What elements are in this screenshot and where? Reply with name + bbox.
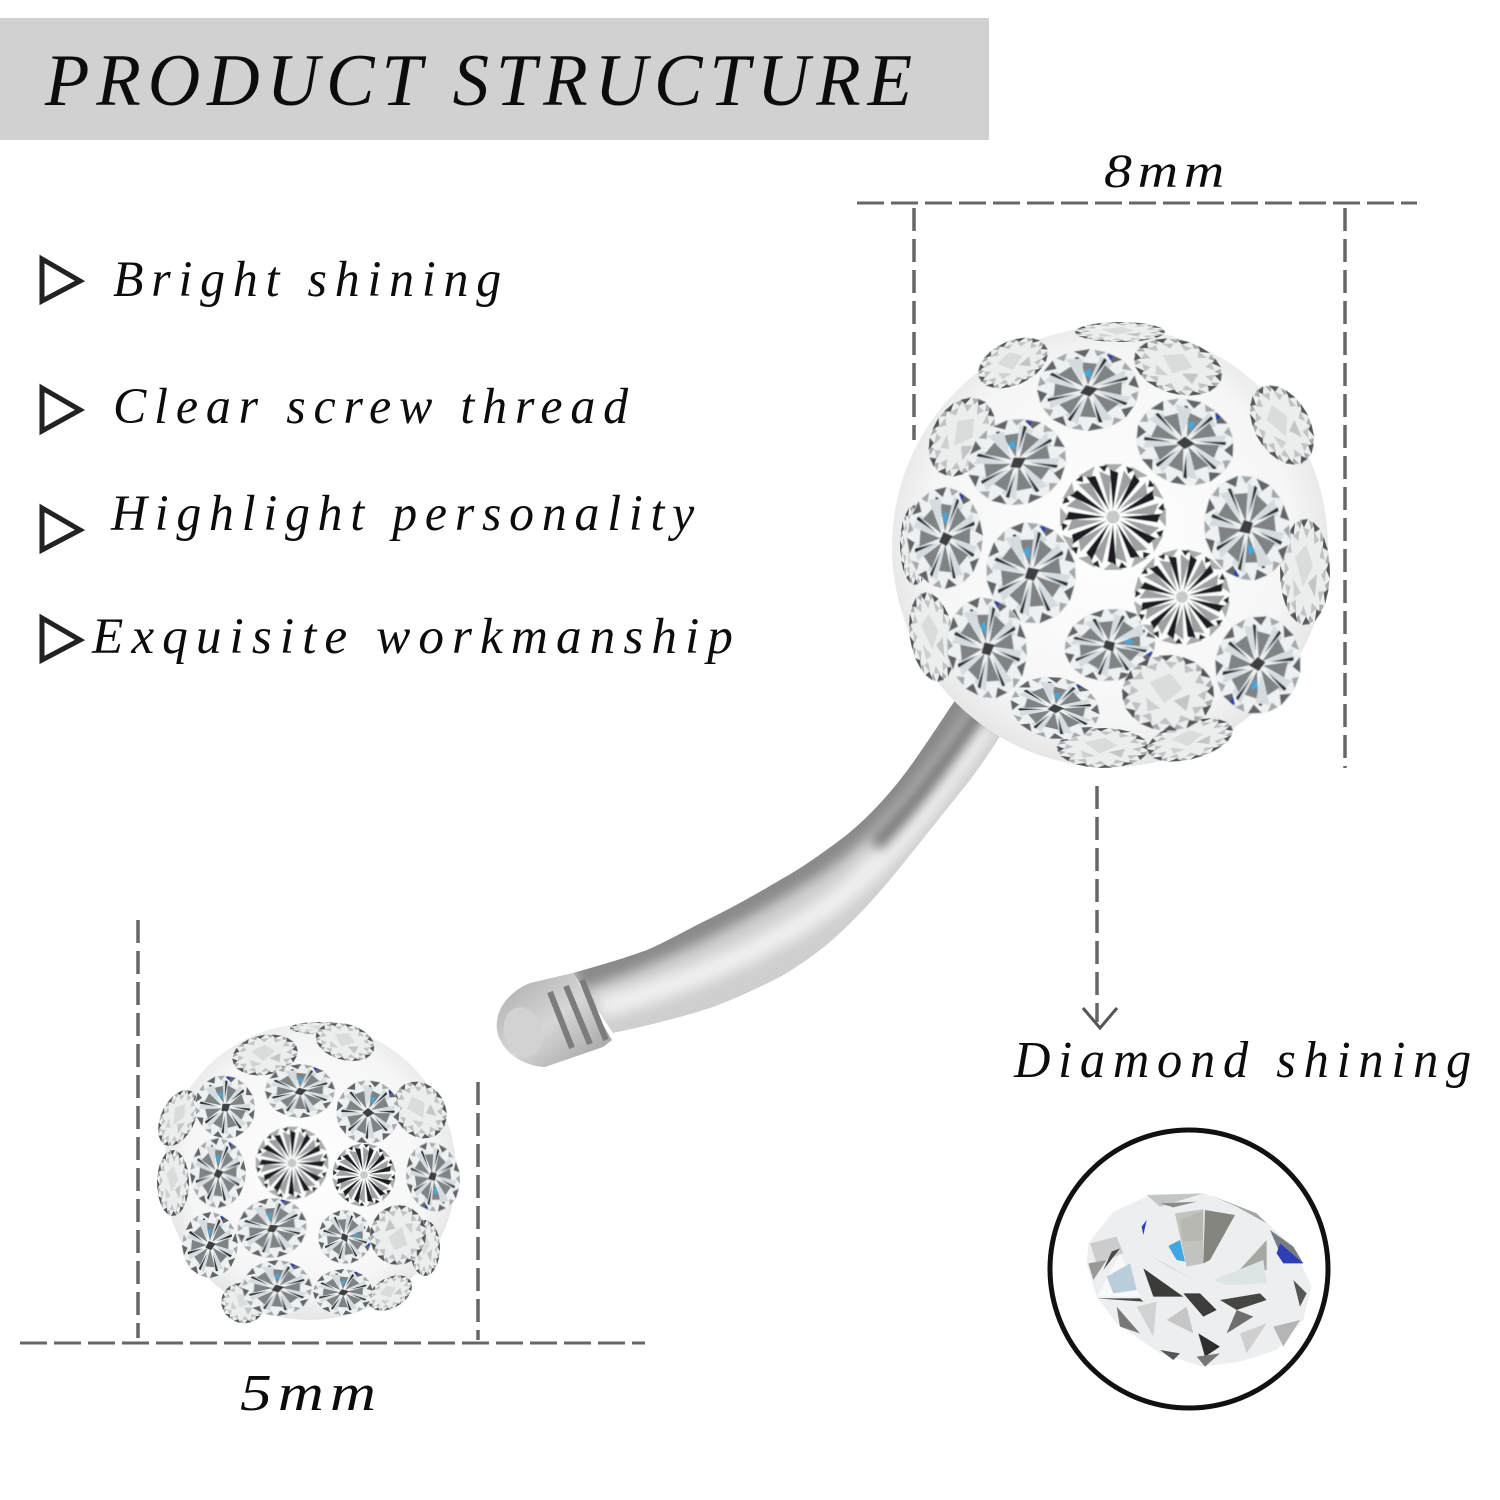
small crystal ball (148, 1015, 467, 1331)
diamond close-up circle (1050, 1130, 1328, 1408)
label: diamond shining: Diamond shining (1013, 1032, 1479, 1089)
feature: exquisite workmanship: Exquisite workmanship (91, 609, 741, 665)
feature: highlight personality: Highlight personality (110, 486, 702, 542)
title text: PRODUCT STRUCTURE (44, 40, 919, 122)
feature: clear screw thread: Clear screw thread (113, 379, 636, 435)
diamond (1087, 1193, 1312, 1367)
dimension: 8mm: 8mm (1104, 145, 1230, 198)
feature list (42, 252, 741, 665)
title banner (0, 18, 989, 140)
large crystal ball (892, 321, 1332, 772)
arrow to diamond label (1083, 786, 1117, 1028)
screw thread tip (497, 973, 612, 1067)
barbell rod (497, 693, 1010, 1067)
feature: bright shining: Bright shining (113, 252, 509, 308)
dimension: 5mm: 5mm (240, 1365, 382, 1422)
